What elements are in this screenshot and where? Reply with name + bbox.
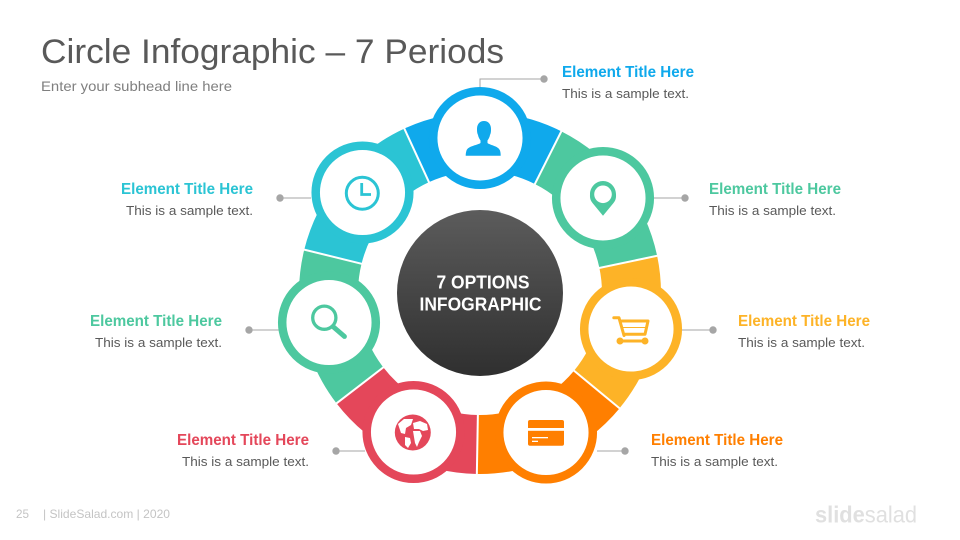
icon: credit card (528, 420, 564, 446)
label: cart: This is a sample text. (738, 335, 865, 350)
label: clock (121, 181, 253, 218)
label: clock: This is a sample text. (126, 203, 253, 218)
node: red globe (332, 385, 460, 479)
node: green pin (556, 151, 689, 245)
node: green search (245, 276, 376, 369)
label: top: Element Title Here (562, 64, 694, 81)
node: teal clock (276, 146, 409, 239)
label: card (651, 432, 783, 469)
subhead: Enter your subhead line here (41, 78, 232, 94)
icon: shopping cart (614, 318, 648, 343)
label: search (90, 313, 222, 350)
logo: slidesalad (815, 502, 917, 528)
label: globe: Element Title Here (177, 432, 309, 449)
segmented ring (287, 111, 675, 490)
label: cart (738, 313, 870, 350)
label: cart: Element Title Here (738, 313, 870, 330)
label: card: Element Title Here (651, 432, 783, 449)
center circle: 7 OPTIONS (436, 272, 530, 292)
label: pin: Element Title Here (709, 181, 841, 198)
center circle (397, 210, 563, 376)
label: top: This is a sample text. (562, 86, 689, 101)
footer: page number: 25 (16, 507, 29, 521)
label: top (562, 64, 694, 101)
icon: globe (395, 414, 431, 450)
label: clock: Element Title Here (121, 181, 253, 198)
node: blue person (433, 75, 548, 185)
label: globe (177, 432, 309, 469)
label: globe: This is a sample text. (182, 454, 309, 469)
label: search: Element Title Here (90, 313, 222, 330)
title: Circle Infographic – 7 Periods (41, 33, 504, 71)
label: pin: This is a sample text. (709, 203, 836, 218)
label: card: This is a sample text. (651, 454, 778, 469)
label: pin (709, 181, 841, 218)
label: search: This is a sample text. (95, 335, 222, 350)
node: yellow cart (584, 282, 717, 376)
icon: clock (346, 177, 378, 209)
icon: magnifier (313, 306, 344, 336)
center circle: INFOGRAPHIC (420, 294, 542, 314)
icon: map pin (590, 181, 616, 216)
icon: person (466, 121, 501, 156)
footer: source: | SlideSalad.com | 2020 (43, 507, 170, 521)
node: orange card (499, 386, 629, 479)
